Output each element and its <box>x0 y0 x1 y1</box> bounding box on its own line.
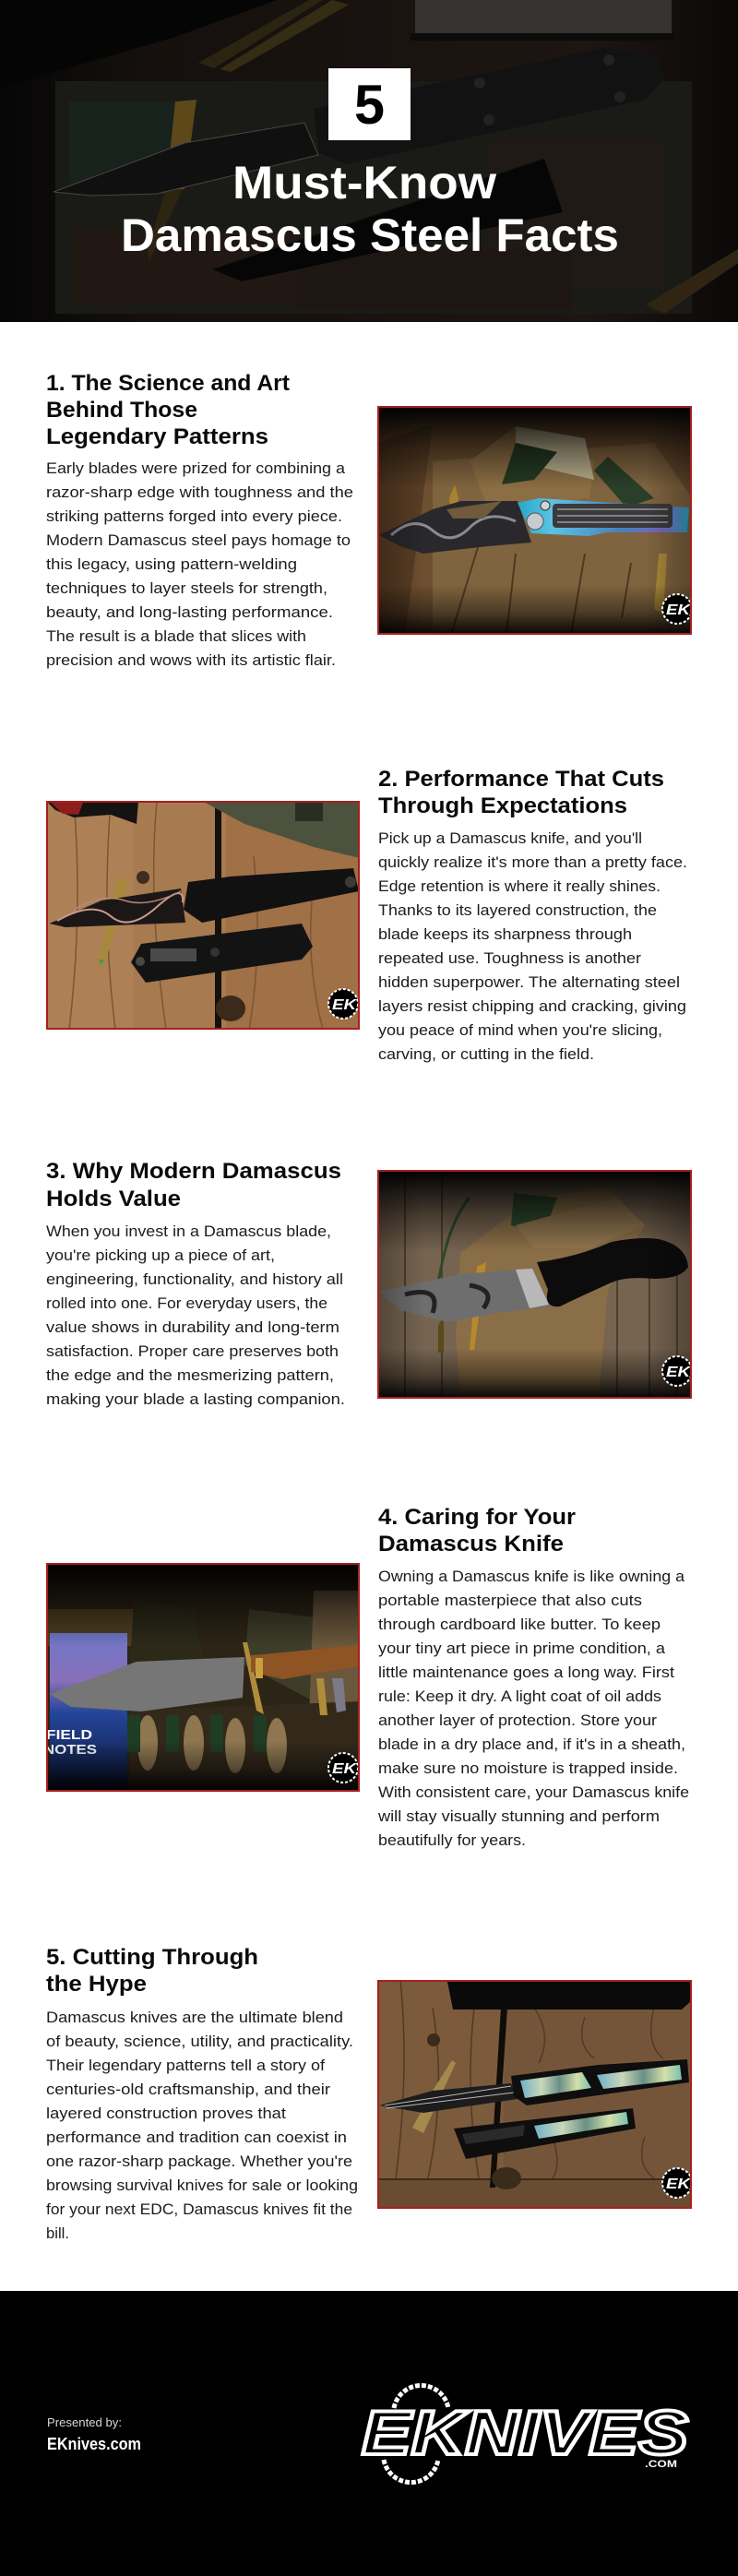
number box <box>328 68 411 140</box>
section 3 photo: damascus fixed blade with black handle <box>377 1170 692 1399</box>
section 2 body text: hidden superpower. The alternating steel <box>378 974 680 991</box>
section 5 body text: for your next EDC, Damascus knives fit the <box>46 2201 352 2218</box>
presented by text: EKnives.com <box>47 2435 141 2453</box>
header photo: knives on a rusty green case <box>0 0 738 322</box>
section 2 body text: blade keeps its sharpness through <box>378 926 632 943</box>
watermark badge: EK <box>332 997 358 1013</box>
section 3 body text: the edge and the mesmerizing pattern, <box>46 1367 334 1384</box>
section 3 heading: Holds Value <box>46 1187 181 1211</box>
section 2 body text <box>378 830 687 1063</box>
section 3 body text <box>46 1223 345 1408</box>
section 3 body text: making your blade a lasting companion. <box>46 1391 345 1408</box>
watermark badge <box>662 1356 692 1386</box>
section 4 photo: bowie knife over gloves and notebook <box>43 1563 360 1792</box>
section 1 heading <box>46 371 290 449</box>
section 4 body text: your tiny art piece in prime condition, a <box>378 1640 666 1657</box>
watermark badge: EK <box>332 1761 358 1777</box>
section 2 body text: carving, or cutting in the field. <box>378 1046 594 1063</box>
section 4 body text: another layer of protection. Store your <box>378 1712 658 1729</box>
section 2 photo: black knives with damascus blade on wood <box>46 801 360 1030</box>
section 4 body text: little maintenance goes a long way. First <box>378 1664 674 1681</box>
section 1 heading: Behind Those <box>46 398 197 423</box>
section 4 body text <box>377 1568 689 1849</box>
section 4 body text: rule: Keep it dry. A light coat of oil adds <box>378 1688 661 1705</box>
watermark badge <box>662 2168 692 2198</box>
watermark badge: EK <box>666 2176 692 2192</box>
section 5 heading: 5. Cutting Through <box>46 1945 258 1970</box>
title: Must-Know <box>232 157 496 209</box>
number box: 5 <box>354 74 385 136</box>
section 2 body text: quickly realize it's more than a pretty face. <box>378 854 687 871</box>
section 2 body text: Thanks to its layered construction, the <box>378 902 657 919</box>
section 3 heading: 3. Why Modern Damascus <box>46 1159 341 1184</box>
section 5 body text: browsing survival knives for sale or looking <box>46 2177 358 2194</box>
watermark badge: EK <box>666 602 692 618</box>
footer <box>0 2291 738 2576</box>
section 1 photo: folding knife with blue handle on tan glove <box>377 406 692 635</box>
watermark badge <box>328 1753 358 1783</box>
section 1 body text: beauty, and long-lasting performance. <box>46 604 333 621</box>
section 3 body text: you're picking up a piece of art, <box>46 1247 275 1264</box>
section 2 heading <box>378 767 664 818</box>
section 5 body text: centuries-old craftsmanship, and their <box>46 2081 331 2098</box>
section 1 body text: precision and wows with its artistic flair. <box>46 652 336 669</box>
section 2 heading: 2. Performance That Cuts <box>378 767 664 792</box>
section 1 body text <box>46 460 353 669</box>
watermark badge: EK <box>666 1365 692 1380</box>
section 3 body text: When you invest in a Damascus blade, <box>46 1223 331 1240</box>
section 5 body text: one razor-sharp package. Whether you're <box>46 2153 352 2170</box>
section 2 heading: Through Expectations <box>378 793 627 818</box>
section 5 body text: bill. <box>46 2225 69 2242</box>
presented by text <box>47 2415 141 2453</box>
section 5 heading <box>46 1945 258 1997</box>
watermark badge <box>662 594 692 624</box>
watermark badge <box>328 989 358 1019</box>
section 2 body text: Pick up a Damascus knife, and you'll <box>378 830 642 847</box>
section 4 body text: through cardboard like butter. To keep <box>378 1616 661 1633</box>
section 2 body text: Edge retention is where it really shines. <box>378 878 661 895</box>
section 1 body text: razor-sharp edge with toughness and the <box>46 484 353 501</box>
section 5 photo: knives with abalone inlay on wood <box>377 1980 692 2209</box>
logo: EKnives gear wordmark: .COM <box>645 2459 677 2470</box>
title <box>121 157 619 261</box>
section 4 body text: will stay visually stunning and perform <box>377 1808 660 1825</box>
section 2 body text: you peace of mind when you're slicing, <box>378 1022 662 1039</box>
section 1 heading: Legendary Patterns <box>46 424 268 449</box>
section 1 heading: 1. The Science and Art <box>46 371 290 396</box>
section 1 body text: The result is a blade that slices with <box>46 628 306 645</box>
presented by text: Presented by: <box>47 2415 122 2429</box>
section 4 body text: beautifully for years. <box>378 1832 526 1849</box>
section 3 body text: value shows in durability and long-term <box>46 1319 339 1336</box>
section 2 body text: layers resist chipping and cracking, giving <box>378 998 686 1015</box>
section 4 photo: bowie knife over gloves and notebook: NOTES <box>43 1742 97 1758</box>
section 3 body text: satisfaction. Proper care preserves both <box>46 1343 339 1360</box>
section 1 body text: this legacy, using pattern-welding <box>46 556 297 573</box>
section 4 heading <box>378 1505 576 1556</box>
title: Damascus Steel Facts <box>121 209 619 261</box>
section 4 body text: Owning a Damascus knife is like owning a <box>378 1568 685 1585</box>
section 3 body text: rolled into one. For everyday users, the <box>46 1295 327 1312</box>
section 4 body text: With consistent care, your Damascus knife <box>378 1784 689 1801</box>
section 5 body text: performance and tradition can coexist in <box>46 2129 347 2146</box>
section 5 body text <box>46 2010 358 2242</box>
logo: EKnives gear wordmark: EKNIVES <box>362 2398 688 2468</box>
section 4 body text: make sure no moisture is trapped inside. <box>378 1760 678 1777</box>
section 1 body text: striking patterns forged into every piece. <box>46 508 342 525</box>
section 5 body text: Damascus knives are the ultimate blend <box>46 2010 343 2026</box>
section 5 body text: layered construction proves that <box>46 2105 286 2122</box>
section 1 body text: techniques to layer steels for strength, <box>46 580 327 597</box>
section 2 body text: repeated use. Toughness is another <box>378 950 642 967</box>
header banner <box>0 0 738 322</box>
section 4 body text: blade in a dry place and, if it's in a sheath, <box>378 1736 685 1753</box>
section 3 heading <box>46 1159 341 1211</box>
section 5 heading: the Hype <box>46 1972 147 1997</box>
section 4 heading: Damascus Knife <box>378 1532 564 1556</box>
section 4 heading: 4. Caring for Your <box>378 1505 576 1530</box>
section 5 body text: Their legendary patterns tell a story of <box>46 2057 325 2074</box>
section 4 photo: bowie knife over gloves and notebook: FIELD <box>46 1727 92 1743</box>
section 1 body text: Early blades were prized for combining a <box>46 460 346 477</box>
section 3 body text: engineering, functionality, and history all <box>46 1271 343 1288</box>
section 4 body text: portable masterpiece that also cuts <box>378 1592 642 1609</box>
section 5 body text: of beauty, science, utility, and practicality. <box>46 2033 353 2050</box>
section 1 body text: Modern Damascus steel pays homage to <box>46 532 351 549</box>
logo: EKnives gear wordmark <box>362 2385 688 2483</box>
